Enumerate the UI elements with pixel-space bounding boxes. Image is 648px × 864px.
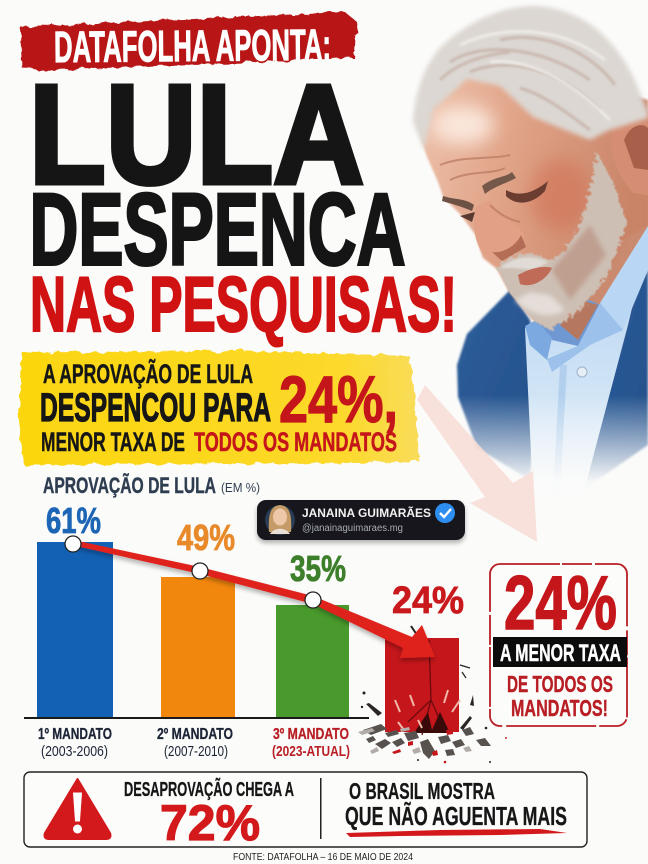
value 24: 24% [392,580,464,622]
data point markers [65,536,321,608]
button [577,367,587,377]
value 61: 61% [46,500,101,541]
side text line 2: MANDATOS! [511,695,608,721]
head skin [421,50,648,328]
value 49: 49% [177,517,235,558]
callout line 1: A APROVAÇÃO DE LULA [43,358,253,389]
avatar [265,505,295,535]
callout line 2: DESPENCOU PARA [40,386,271,430]
forehead highlight [430,105,494,145]
bottom panel [24,772,587,851]
cheek [530,159,590,231]
headline line 2: DESPENCA [30,172,406,286]
decline arrow [76,541,435,658]
bar 4 [385,638,459,732]
banner text: DATAFOLHA APONTA: [54,21,331,72]
shirt [525,240,648,495]
callout line 3 red: TODOS OS MANDATOS [194,427,397,457]
value 35: 35% [290,548,346,589]
icon: warning triangle [44,779,110,839]
shirt placket shadow [547,303,623,372]
jacket right [583,268,648,490]
author name: JANAINA GUIMARÃES [302,505,431,520]
ear [611,109,648,195]
author handle: @janainaguimaraes.mg [302,523,403,534]
label 3: 3º MANDATO [273,726,349,743]
collar shadow [536,298,600,346]
collar right [600,226,648,330]
wrinkles [440,155,520,222]
bar 1 [37,542,113,717]
hair strands [440,37,615,130]
author badge [257,500,465,540]
slogan line 1: O BRASIL MOSTRA [349,778,495,804]
headline [29,55,457,348]
title banner [20,12,357,72]
fade [440,395,648,510]
eyes and brows [442,196,474,211]
source: FONTE: DATAFOLHA – 16 DE MAIO DE 2024 [233,851,413,863]
period 1: (2003-2006) [41,743,108,760]
side callout [490,561,627,726]
bar 3 [276,605,349,717]
mouth [518,267,552,285]
axis [24,717,369,719]
yellow callout [18,351,420,465]
headline line 1: LULA [29,55,364,213]
label 2: 2º MANDATO [157,726,233,743]
bar 2 [161,577,235,717]
divider [320,778,322,839]
bar chart [24,500,464,760]
chart title: APROVAÇÃO DE LULA [43,473,216,498]
period 2: (2007-2010) [164,743,228,760]
period 3: (2023-ATUAL) [272,743,350,760]
black strip [493,637,627,667]
neck [540,165,648,335]
callout big number: 24%, [279,362,398,436]
beard [497,152,627,330]
jacket left [457,290,540,480]
photo: Lula looking down [413,6,648,510]
background arrow: faint pink [417,385,537,542]
chart unit: (EM %) [221,480,260,495]
callout line 3 black: MENOR TAXA DE [41,427,185,457]
rubble and cracks [358,626,507,763]
collar left [525,320,552,360]
label 1: 1º MANDATO [38,726,112,743]
nose [474,200,524,257]
disapproval text: DESAPROVAÇÃO CHEGA A [124,778,294,801]
disapproval number: 72% [160,795,260,851]
verified badge [435,503,455,523]
hair [413,6,648,150]
red underline [346,829,567,837]
